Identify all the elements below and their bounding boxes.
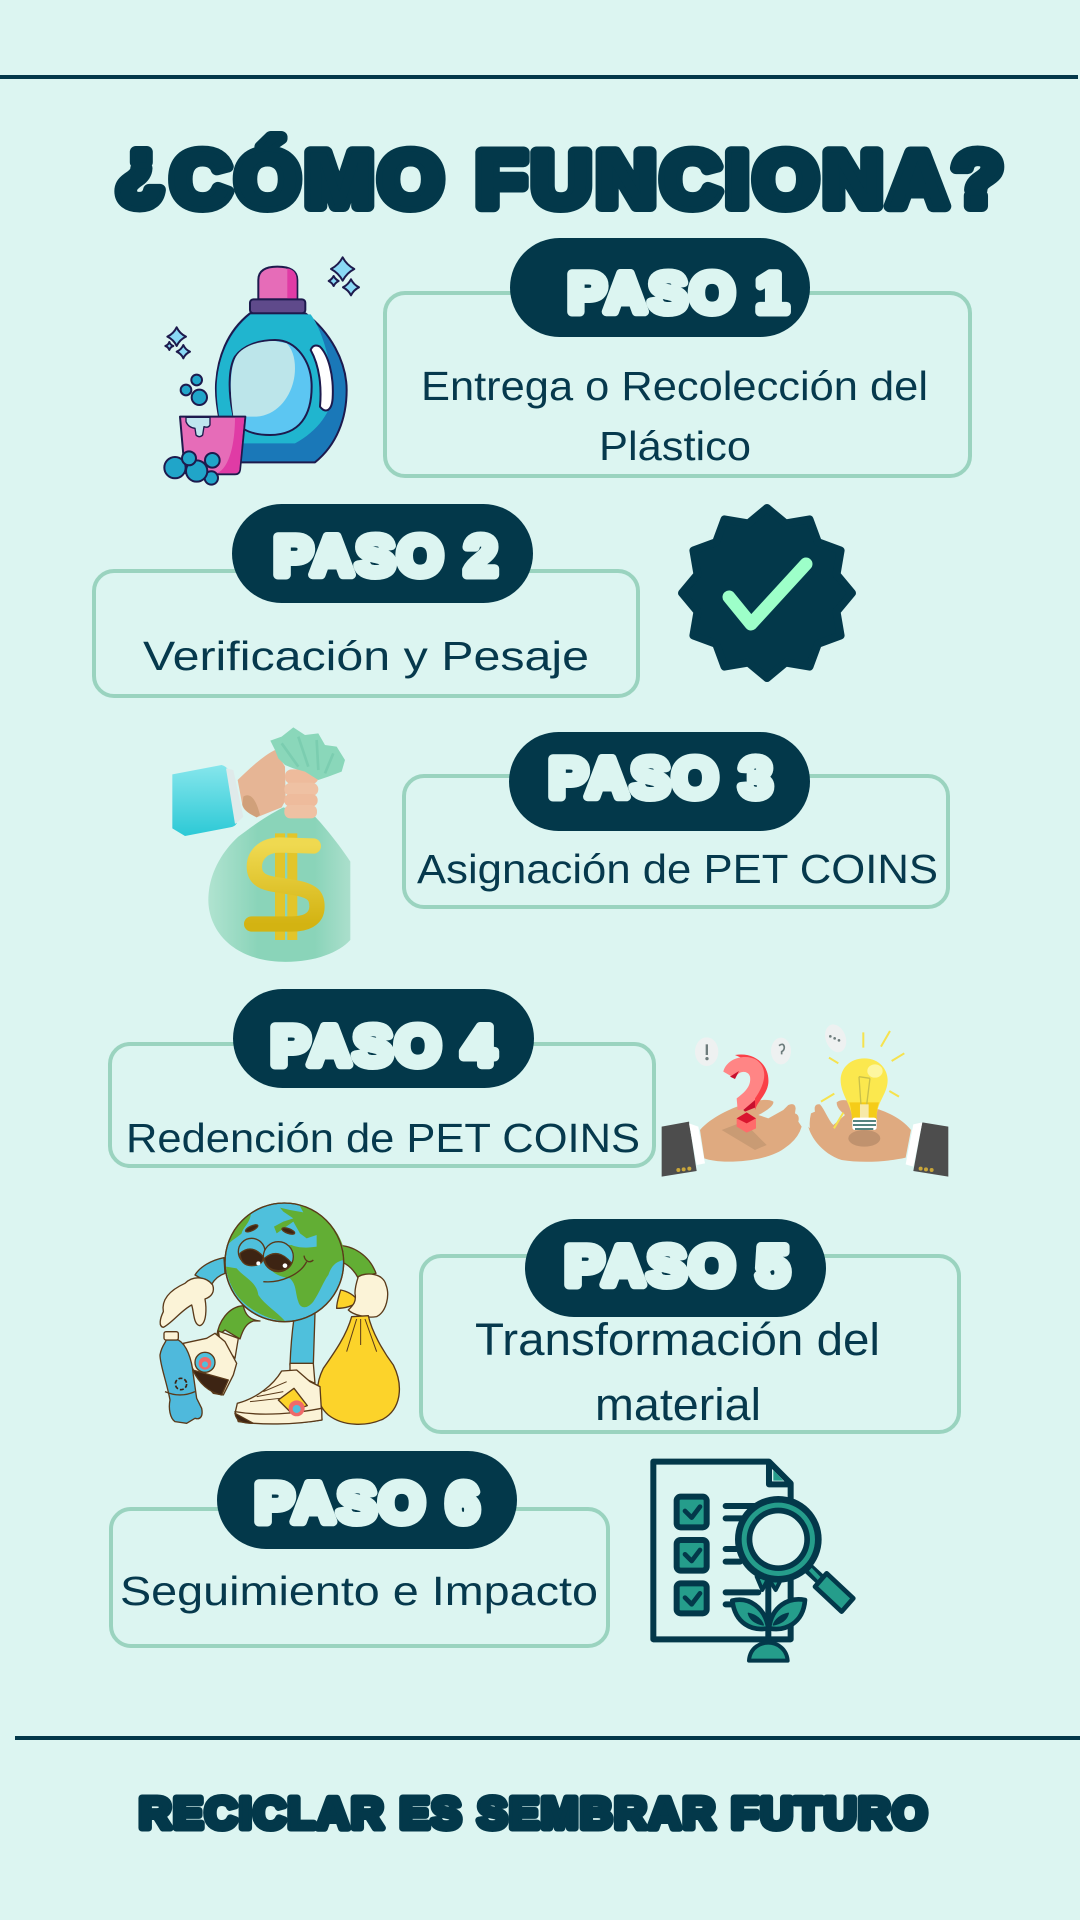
step 6 pill <box>217 1451 517 1549</box>
title: ¿ <box>116 122 164 210</box>
step 1 text: Plástico <box>599 423 751 469</box>
step 1 pill <box>510 238 810 337</box>
step 3 text: Asignación de PET COINS <box>417 846 938 892</box>
step 3 box <box>404 776 948 907</box>
panel: step 2 <box>94 504 638 696</box>
panel: step 5 <box>421 1219 959 1432</box>
step 6 text: Seguimiento e Impacto <box>120 1568 598 1614</box>
panel: step 4 <box>110 989 654 1166</box>
step 4 box <box>110 1044 654 1166</box>
step 3 heading: PASO 3 <box>549 746 775 809</box>
title: CÓMO FUNCIONA? <box>171 135 1008 223</box>
footer slogan: RECICLAR ES SEMBRAR FUTURO <box>139 1789 929 1838</box>
step 1 heading: PASO 1 <box>568 261 791 324</box>
step 4 heading: PASO 4 <box>271 1014 498 1077</box>
step 5 pill <box>525 1219 826 1317</box>
step 2 text: Verificación y Pesaje <box>143 633 589 679</box>
step 2 box <box>94 571 638 696</box>
icon: detergent bottle <box>164 257 359 485</box>
icon: earth character with recycling <box>160 1203 399 1424</box>
panel: step 3 <box>404 732 948 907</box>
step 1 text: Entrega o Recolección del <box>421 363 928 409</box>
step 5 text: material <box>595 1379 761 1430</box>
step 3 pill <box>509 732 810 831</box>
step 6 heading: PASO 6 <box>255 1471 482 1534</box>
panel: step 6 <box>111 1451 608 1646</box>
step 5 text: Transformación del <box>475 1314 880 1365</box>
icon: hands with question and idea <box>662 1021 948 1177</box>
step 6 box <box>111 1509 608 1646</box>
step 5 text <box>475 1314 880 1430</box>
icon: checklist with magnifier and plant <box>653 1462 853 1661</box>
icon: money bag in hand <box>172 727 350 962</box>
panel: step 1 <box>385 238 970 476</box>
step 2 pill <box>232 504 533 603</box>
step 1 text <box>421 363 928 469</box>
step 5 heading: PASO 5 <box>565 1234 792 1297</box>
step 1 box <box>385 293 970 476</box>
step 4 text: Redención de PET COINS <box>126 1115 640 1161</box>
step 4 pill <box>233 989 534 1088</box>
step 5 box <box>421 1256 959 1432</box>
icon: check badge <box>682 508 852 678</box>
step 2 heading: PASO 2 <box>274 524 500 587</box>
